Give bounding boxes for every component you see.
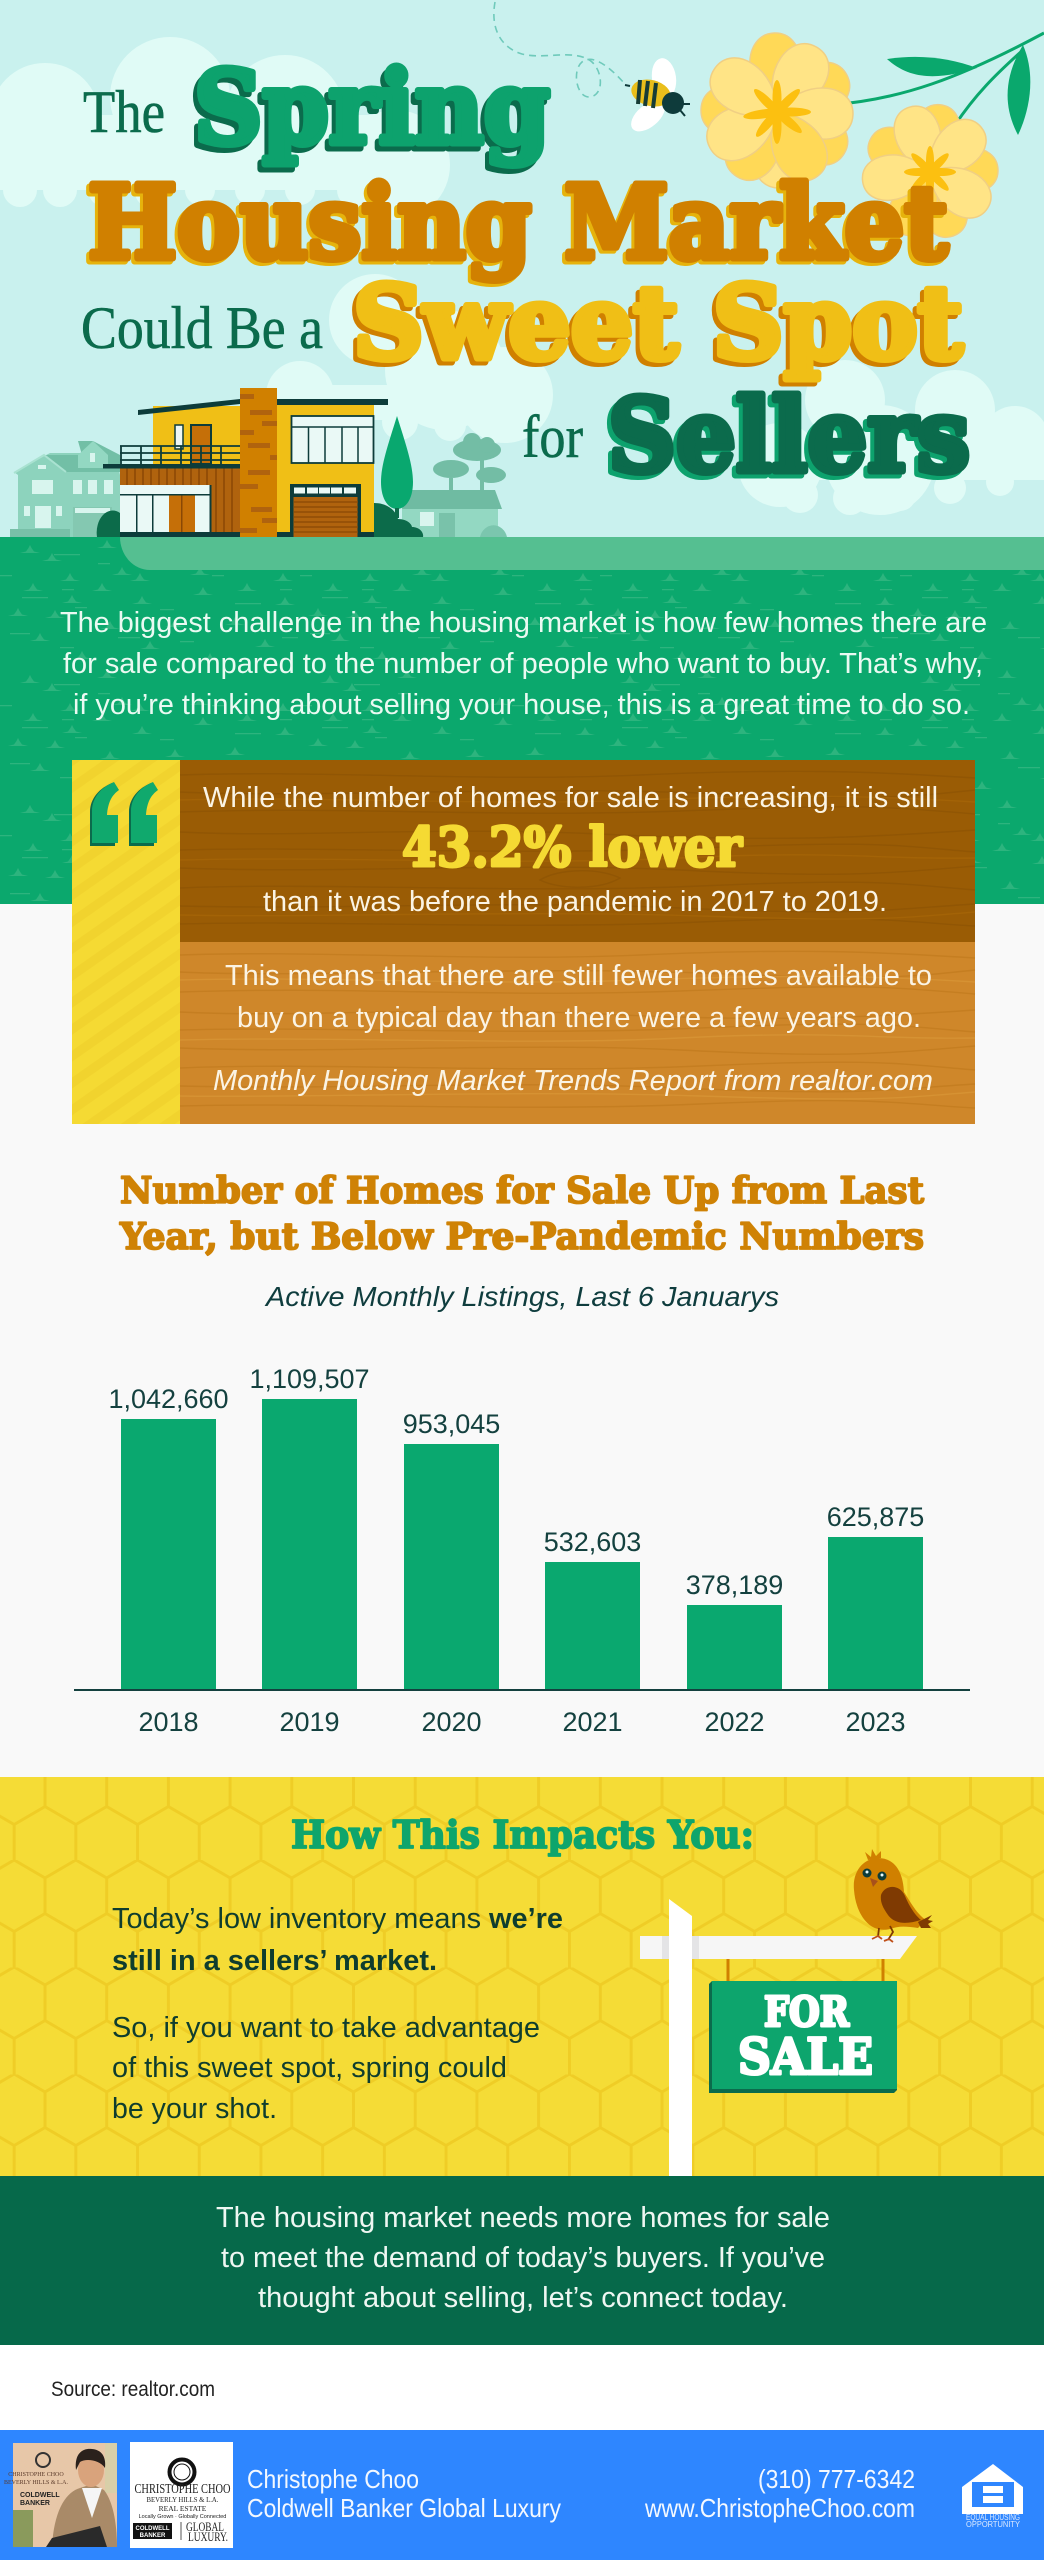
- bar chart: 2018: [138, 1707, 199, 1737]
- garage: [277, 532, 374, 537]
- icon: bee flight trail: [494, 2, 624, 97]
- icon: equal housing opportunity: OPPORTUNITY: [966, 2520, 1021, 2529]
- title: Sweet Spot: [349, 267, 959, 386]
- title: Housing Market: [85, 166, 945, 285]
- title: Spring: [194, 48, 550, 167]
- icon: flower stems and leaves: [830, 33, 1044, 135]
- statistic: 43.2% lower: 43.2% lower: [402, 815, 743, 879]
- agent photo: BEVERLY HILLS & L.A.: [4, 2480, 68, 2486]
- upper windows: [292, 416, 374, 463]
- brokerage logo: [130, 2442, 233, 2548]
- bar chart: 2019: [279, 1707, 340, 1737]
- quote text: While the number of homes for sale is increasing, it is still: [203, 782, 938, 814]
- bar chart: 1,109,507: [249, 1364, 370, 1394]
- body text: be your shot.: [112, 2093, 277, 2125]
- icon: bee: [625, 57, 690, 137]
- panel: sky header background: [0, 0, 1044, 540]
- agent phone and website: (310) 777-6342: [758, 2464, 915, 2494]
- brokerage logo: Locally Grown · Globally Connected: [139, 2514, 226, 2520]
- panel: call to action band: thought about selling, let’s connect today.: [258, 2282, 788, 2314]
- light wood panel: [180, 942, 975, 1124]
- chart heading: [119, 1170, 924, 1258]
- bar chart: 2022: [704, 1707, 765, 1737]
- brokerage logo: COLDWELL: [136, 2526, 170, 2532]
- chart heading: Year, but Below Pre-Pandemic Numbers: [119, 1216, 924, 1258]
- brokerage logo: BEVERLY HILLS & L.A.: [146, 2495, 219, 2504]
- clouds: [0, 37, 1044, 515]
- brokerage logo: LUXURY.: [188, 2529, 228, 2544]
- icon: small yellow flower: [860, 100, 1000, 244]
- intro paragraph: for sale compared to the number of people who want to buy. That’s why,: [63, 648, 983, 680]
- grass texture: [0, 537, 1044, 904]
- title: Sellers: [604, 380, 966, 499]
- agent name and company: Coldwell Banker Global Luxury: [247, 2493, 561, 2523]
- front lawn strip: [120, 537, 1044, 570]
- agent phone and website: [644, 2464, 915, 2523]
- heading: How This Impacts You:: [291, 1812, 754, 1857]
- source text: Source: realtor.com: [51, 2378, 215, 2401]
- bar chart: 625,875: [827, 1502, 924, 1532]
- panel: chart section background: [0, 904, 1044, 1777]
- bar chart: 532,603: [544, 1527, 641, 1557]
- balcony rail: [120, 446, 240, 465]
- chimney: [240, 388, 277, 537]
- background trees and right house: [402, 433, 507, 537]
- panel: call to action band: The housing market needs more homes for sale: [216, 2202, 830, 2234]
- icon: for sale sign post: [640, 1899, 917, 2176]
- panel: call to action band: to meet the demand of today’s buyers. If you’ve: [221, 2242, 825, 2274]
- icon: main modern house: [97, 388, 423, 537]
- title: Sweet Spot: [353, 263, 963, 382]
- agent photo: [4, 2443, 117, 2547]
- panel: agent footer: [0, 2430, 1044, 2560]
- icon: equal housing opportunity: [962, 2464, 1023, 2529]
- title: Spring: [190, 53, 546, 172]
- bar chart: 2020: [421, 1707, 482, 1737]
- body text: still in a sellers’ market.: [112, 1945, 437, 1977]
- quote text: [203, 782, 938, 1097]
- dark wood panel: [180, 760, 975, 942]
- bar chart: 1,042,660: [108, 1384, 229, 1414]
- quote text: This means that there are still fewer homes available to: [225, 960, 932, 992]
- icon: quotation marks: [90, 782, 158, 846]
- balcony door: [191, 425, 211, 464]
- icon: for sale sign post: FOR: [764, 1988, 850, 2036]
- lower glass: [120, 485, 211, 532]
- panel: call to action band: [0, 2176, 1044, 2345]
- title: for: [522, 404, 583, 470]
- agent photo: COLDWELL: [20, 2492, 60, 2499]
- chart heading: Number of Homes for Sale Up from Last: [120, 1170, 924, 1212]
- brokerage logo: REAL ESTATE: [159, 2504, 207, 2513]
- bar chart: 2023: [845, 1707, 906, 1737]
- intro paragraph: if you’re thinking about selling your house, this is a great time to do so.: [73, 689, 970, 721]
- title: [81, 48, 970, 499]
- panel: quote box: [72, 760, 975, 1124]
- agent photo: BANKER: [20, 2500, 50, 2507]
- icon: for sale sign post: SALE: [738, 2027, 873, 2086]
- left background house: [10, 441, 120, 537]
- siding: [120, 468, 240, 486]
- brokerage logo: CHRISTOPHE CHOO: [134, 2481, 231, 2496]
- quote yellow column: [72, 760, 180, 1124]
- intro paragraph: [60, 607, 987, 721]
- body text: of this sweet spot, spring could: [112, 2052, 507, 2084]
- quote text: Monthly Housing Market Trends Report from realtor.com: [213, 1065, 933, 1097]
- quote text: buy on a typical day than there were a few years ago.: [237, 1002, 921, 1034]
- chart subtitle: Active Monthly Listings, Last 6 Januarys: [264, 1281, 779, 1312]
- bar chart: [74, 1364, 970, 1737]
- bar chart: 378,189: [686, 1570, 783, 1600]
- agent name and company: Christophe Choo: [247, 2464, 419, 2494]
- quote text: than it was before the pandemic in 2017 to 2019.: [263, 886, 887, 918]
- bar chart: 953,045: [403, 1409, 500, 1439]
- bar chart: 2021: [562, 1707, 623, 1737]
- agent name and company: [247, 2464, 561, 2523]
- source strip: [0, 2345, 1044, 2430]
- icon: equal housing opportunity: EQUAL HOUSING: [966, 2513, 1020, 2522]
- agent phone and website: www.ChristopheChoo.com: [644, 2493, 915, 2523]
- brokerage logo: BANKER: [140, 2533, 166, 2539]
- brokerage logo: GLOBAL: [186, 2519, 224, 2534]
- body text: [112, 1903, 563, 2125]
- intro paragraph: The biggest challenge in the housing market is how few homes there are: [60, 607, 987, 639]
- agent photo: CHRISTOPHE CHOO: [8, 2472, 64, 2478]
- title: The: [83, 79, 165, 145]
- icon: large yellow flower: [698, 32, 859, 191]
- title: Sellers: [608, 376, 970, 495]
- panel: grass background: [0, 537, 1044, 904]
- body text: Today’s low inventory means we’re: [112, 1903, 563, 1935]
- panel: how this impacts you: [0, 1777, 1044, 2176]
- title: Housing Market: [88, 163, 948, 282]
- body text: So, if you want to take advantage: [112, 2012, 540, 2044]
- title: Could Be a: [81, 295, 323, 361]
- icon: bird: [854, 1849, 933, 1942]
